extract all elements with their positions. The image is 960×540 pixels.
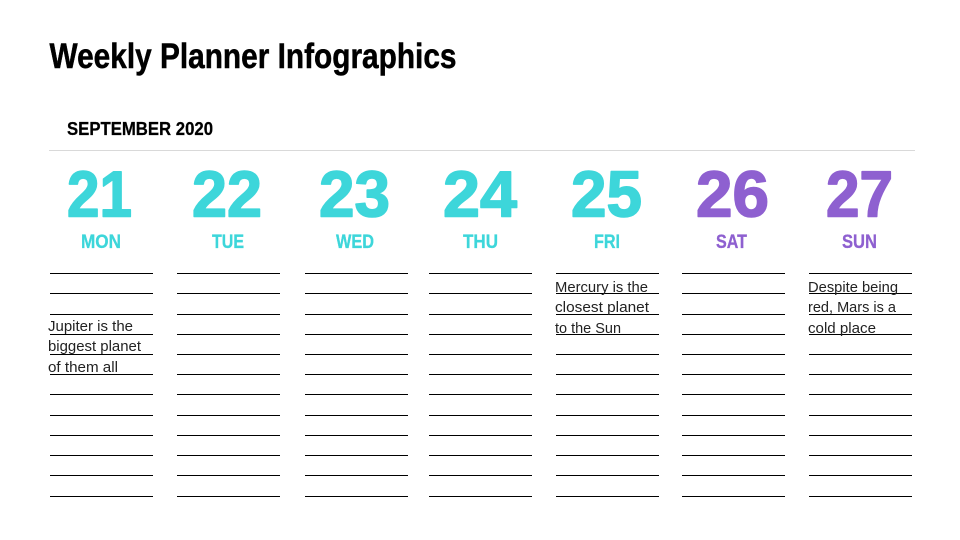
column: Tuesday (177, 158, 280, 496)
note: Jupiter: Jupiter is the (48, 319, 133, 335)
weekday SUN: SUN (842, 232, 877, 253)
ruled lines (429, 274, 532, 496)
column: Thursday (429, 158, 532, 496)
weekday FRI: FRI (594, 232, 620, 253)
note: Mars (808, 280, 898, 337)
note: Jupiter: biggest planet (48, 339, 141, 355)
column: Wednesday (305, 158, 408, 496)
note: Mars: cold place (808, 321, 876, 337)
ruled lines (556, 274, 659, 496)
weekday WED: WED (336, 232, 374, 253)
month heading: SEPTEMBER 2020 (67, 119, 213, 139)
date number 22: 22 (192, 158, 262, 230)
note: Mercury (555, 280, 649, 337)
column: Monday (48, 158, 153, 496)
column: Friday (555, 158, 659, 496)
ruled lines (809, 274, 912, 496)
title: Weekly Planner Infographics (50, 37, 456, 76)
date number 24: 24 (443, 158, 517, 230)
ruled lines (682, 274, 785, 496)
weekday MON: MON (81, 232, 121, 253)
ruled lines (177, 274, 280, 496)
note: Mars: Despite being (808, 280, 898, 296)
note: Mercury: to the Sun (555, 321, 621, 337)
date number 25: 25 (571, 158, 642, 230)
note: Mercury: Mercury is the (555, 280, 648, 296)
date number 27: 27 (826, 158, 893, 230)
weekday SAT: SAT (716, 232, 747, 253)
note: Mars: red, Mars is a (808, 300, 897, 316)
note: Jupiter: of them all (48, 360, 118, 376)
date number 21: 21 (67, 158, 132, 230)
date number 23: 23 (319, 158, 390, 230)
ruled lines (50, 274, 153, 496)
note: Jupiter (48, 319, 141, 376)
weekday THU: THU (463, 232, 498, 253)
column: Saturday (682, 158, 785, 496)
ruled lines (305, 274, 408, 496)
weekday TUE: TUE (212, 232, 244, 253)
note: Mercury: closest planet (555, 300, 649, 316)
column: Sunday (808, 158, 912, 496)
date number 26: 26 (696, 158, 769, 230)
